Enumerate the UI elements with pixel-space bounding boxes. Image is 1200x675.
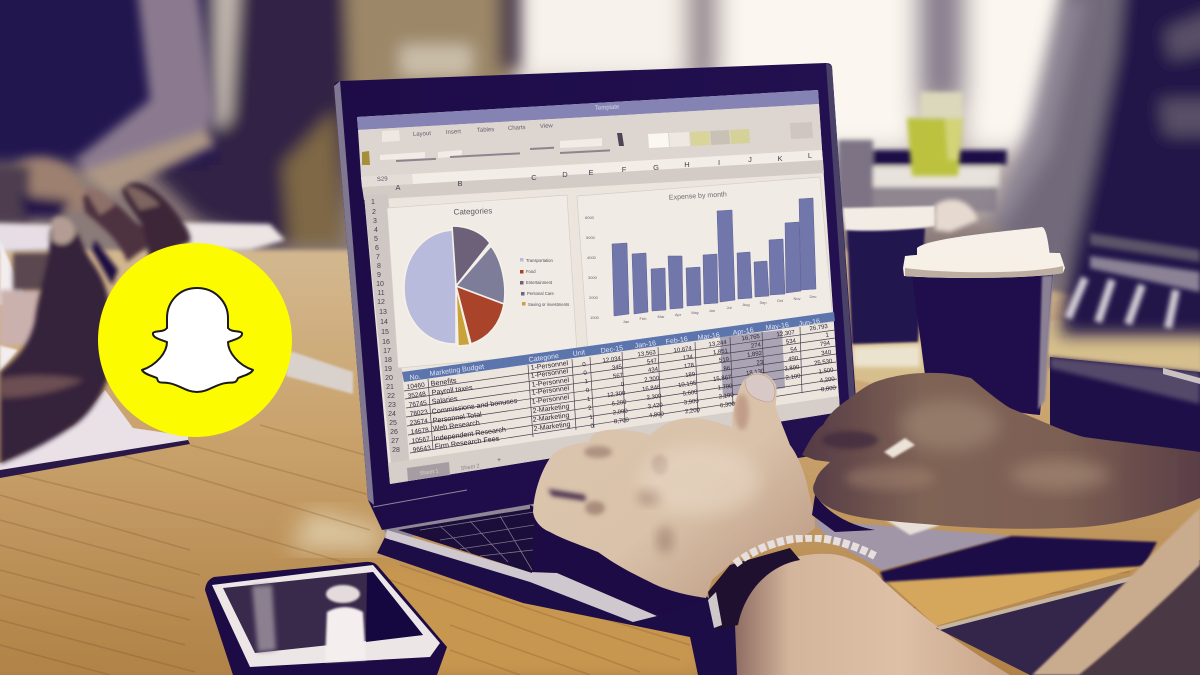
month labels: Jun [709,308,715,313]
numeric data cells: 2,100 [719,392,735,400]
keyboard [398,508,535,573]
numeric data cells: 3,890 [784,365,800,373]
month labels: Feb [640,316,647,321]
column headers: A [395,183,401,192]
title bar [357,90,819,130]
marketing budget table [402,312,837,454]
budget item names: Commissions and bonuses [431,396,518,416]
column headers: J [748,155,752,164]
month labels: Aug [742,302,750,307]
numeric data cells [582,324,837,430]
y axis labels: 2000 [589,295,599,300]
numeric data cells: 178 [684,363,695,370]
month labels: Oct [777,298,784,303]
numeric data cells: 519 [719,357,730,364]
numeric data cells: 1,851 [713,348,729,356]
row numbers: 21 [386,384,394,391]
knuckle highlights [845,399,1110,490]
row numbers: 2 [372,209,376,216]
budget item names: Salaries [431,394,458,406]
numeric data cells: 794 [820,341,831,348]
budget item names: Personnel Total [432,410,483,425]
chart title: Categories: Categories [453,206,492,217]
month labels: Jul [726,305,732,310]
category column: 1-Personnel [531,394,570,406]
column headers: H [684,160,690,169]
table grid [404,327,837,453]
green cup in background [907,92,963,176]
numeric data cells: 1 [584,379,589,385]
ribbon: Layout [413,131,431,138]
numeric data cells: 12,034 [602,356,622,364]
numeric data cells: 2,300 [646,394,663,402]
category column: 1-Personnel [531,377,570,389]
numeric data cells: 13,563 [637,350,657,358]
blurred office background [0,0,1200,340]
column headers: G [653,163,659,172]
formula bar [361,150,823,188]
ID numbers: 10460 [406,382,426,391]
finger gaps and knuckle shading [548,446,674,554]
icon: Snapchat logo [98,243,292,437]
category column: 1-Personnel [530,368,569,380]
forearm [735,554,1010,675]
numeric data cells: 54 [790,347,798,354]
month labels: May [691,310,699,315]
row numbers: 16 [382,339,390,346]
pie legend: Saving or investments [528,302,569,307]
marketing budget table: No. [409,374,421,382]
numeric data cells: 547 [647,358,658,366]
row numbers: 20 [385,375,393,382]
numeric data cells: 8,800 [821,385,837,393]
phone screen [223,572,423,653]
numeric data cells: 0 [582,362,587,368]
numeric data cells: 490 [788,356,799,363]
row numbers: 19 [384,366,392,373]
numeric data cells: 12,307 [776,330,796,338]
numeric data cells: 189 [685,372,696,379]
numeric data cells: 5,600 [682,390,699,398]
pie legend: Entertainment [526,280,553,285]
category column: 2-Marketing [532,412,570,424]
month labels [623,294,817,324]
numeric data cells: 134 [683,354,694,362]
row numbers: 13 [379,309,387,316]
numeric data cells: 0 [586,388,590,394]
bar chart panel: Expense by month [577,177,833,352]
watch and bracelet [708,538,875,630]
laptop [334,63,1157,675]
ribbon: Tables [477,127,494,134]
row numbers: 10 [376,281,384,288]
numeric data cells: 0 [590,423,595,430]
month labels: Jan [623,319,629,324]
budget item names: Payroll taxes [431,383,473,397]
numeric data cells: 2,200 [685,407,701,415]
pie legend: Food [526,269,536,274]
dark notebook, right table [1050,357,1200,480]
pie chart panel: Categories [387,195,577,368]
row numbers: 1 [371,199,375,206]
column headers: I [718,158,720,167]
category column: 2-Marketing [532,403,570,415]
row numbers: 6 [375,245,379,252]
sheet tabs [388,396,840,484]
numeric data cells: 10,674 [673,346,693,354]
numeric data cells: 86 [723,366,731,373]
y axis labels: 6000 [585,215,595,220]
title bar: Template [595,105,620,112]
budget item names [430,376,518,451]
laptop base [382,498,1157,622]
budget item names: Benefits [430,376,457,388]
marketing budget table: Apr-16 [732,327,754,337]
category column [530,360,571,433]
numeric data cells: 1 [825,332,830,339]
ID numbers: 23674 [409,418,429,427]
numeric data cells: 340 [821,350,832,357]
ID numbers: 76745 [408,400,428,409]
formula bar: S29 [377,176,388,183]
pie legend: Personal Care [527,291,554,296]
row numbers: 12 [377,299,385,306]
numeric data cells: 26,793 [809,324,829,332]
numeric data cells: 0 [621,382,625,388]
budget item names: Web Research [432,418,480,433]
spreadsheet screen [357,90,840,484]
numeric data cells: 2,000 [613,408,629,416]
numeric data cells: 3,900 [684,398,700,406]
tablet and foreground edge [936,508,1200,675]
row numbers: 18 [384,357,392,364]
column headers: L [808,151,812,160]
ID numbers: 14678 [410,427,430,436]
left person's hand [0,183,190,464]
ribbon: Charts [508,125,526,132]
category column: 1-Personnel [530,360,569,372]
ribbon: File [385,133,395,140]
numeric data cells: 1,700 [750,378,767,386]
table header band [402,312,835,382]
chart title: Expense by month: Expense by month [669,191,727,202]
ID numbers [406,382,432,454]
ribbon [358,104,822,177]
column headers: E [588,168,594,177]
papers on table, left [0,222,353,478]
front coffee cup [903,227,1065,415]
row numbers: 24 [388,411,396,418]
numeric data cells: 4,800 [649,411,665,419]
marketing budget table: Jun-16 [798,318,821,328]
numeric data cells: 434 [648,367,659,374]
column headers: K [777,154,783,163]
bars [612,198,816,316]
numeric data cells: 15,867 [713,375,732,383]
numeric data cells: 4,200 [820,376,836,384]
sheet tabs: Sheet 2 [460,463,480,472]
row numbers: 22 [387,393,395,400]
row numbers: 27 [391,438,399,445]
numeric data cells: 25,530 [814,359,833,367]
numeric data cells: 345 [612,364,623,372]
row numbers: 8 [377,263,381,270]
budget item names: Independent Research [433,425,506,443]
month labels: Mar [658,314,665,319]
right hand on trackpad [802,373,1200,532]
marketing budget table: Mar-16 [697,332,720,342]
ID numbers: 35248 [407,391,427,400]
pie legend [520,258,569,307]
numeric data cells: 2,100 [785,374,802,382]
y axis labels [585,215,600,320]
rear coffee cup [843,200,978,344]
numeric data cells: 0 [583,370,588,377]
month labels: Apr [675,312,682,317]
marketing budget table: Dec-15 [600,345,624,355]
marketing budget table: May-16 [765,322,790,332]
column headers: F [622,165,627,174]
row numbers: 11 [377,290,385,297]
typing hand with thumb [533,373,815,598]
month labels: Sep [759,300,767,305]
numeric data cells: 1,892 [747,351,763,359]
marketing budget table: Feb-16 [665,336,688,346]
ID numbers: 96643 [412,445,432,454]
sheet tabs: Sheet 1 [419,468,439,477]
row numbers: 17 [383,348,391,355]
numeric data cells: 16,765 [741,334,761,342]
column headers [362,151,824,200]
numeric data cells: 2,300 [644,376,660,384]
numeric data cells: 274 [751,342,762,350]
budget item names: Firm Research Fees [434,434,500,451]
row numbers: 25 [389,420,397,427]
numeric data cells: 16,846 [642,385,661,393]
month labels: Dec [809,294,817,299]
numeric data cells: 8,700 [614,417,630,425]
numeric data cells: 6,200 [611,400,628,408]
y axis labels: 5000 [586,235,596,240]
numeric data cells: 12,300 [607,391,626,399]
numeric data cells: 23 [756,360,764,367]
row numbers: 15 [381,329,389,336]
ribbon: Insert [446,129,461,136]
column headers: D [562,170,568,179]
numeric data cells: 10,195 [678,381,697,389]
row numbers: 28 [392,447,400,454]
category column: 1-Personnel [531,385,570,397]
marketing budget table: Marketing Budget [429,364,485,378]
row numbers: 9 [377,272,381,279]
wood grain [0,425,1130,675]
row numbers: 26 [390,429,398,436]
ID numbers: 78023 [409,409,429,418]
row numbers: 3 [373,218,377,225]
y axis labels: 3000 [588,275,598,280]
numeric data cells: 18,130 [746,369,765,377]
numeric data cells: 6,300 [720,401,736,409]
row numbers: 4 [374,227,378,234]
pie chart [404,226,505,346]
numeric data cells: 567 [613,373,624,380]
numeric data cells: 1 [589,414,594,421]
right person in grey sweater [990,0,1200,335]
wooden table [0,250,1200,675]
marketing budget table: Unit [572,349,586,358]
sheet tabs: + [497,457,501,464]
icon: Snapchat ghost [142,288,253,392]
row numbers [364,194,410,473]
pie legend: Transportation [526,258,554,263]
numeric data cells: 1 [587,397,591,403]
row numbers: 5 [374,236,378,243]
numeric data cells: 13,244 [708,340,728,348]
category column: 2-Marketing [533,421,571,433]
column headers: B [457,179,463,188]
marketing budget table: Jan-16 [634,340,657,350]
y axis labels: 4000 [587,255,597,260]
column headers: C [531,173,537,182]
numeric data cells: 534 [786,338,797,346]
numeric data cells: 2 [588,406,593,412]
marketing budget table: Categorie [528,353,559,364]
ribbon: View [540,123,554,130]
row numbers: 14 [380,319,388,326]
ID numbers: 10567 [411,436,431,445]
numeric data cells: 1,700 [717,384,734,392]
laptop shadow and body underside [377,533,737,675]
month labels: Nov [793,296,801,301]
numeric data cells: 3,420 [648,402,664,410]
row numbers: 7 [376,254,380,261]
laptop lid [334,63,856,530]
numeric data cells: 1,500 [818,368,835,376]
smartphone [205,562,447,675]
row numbers: 23 [388,402,396,409]
y axis labels: 1000 [590,315,600,320]
